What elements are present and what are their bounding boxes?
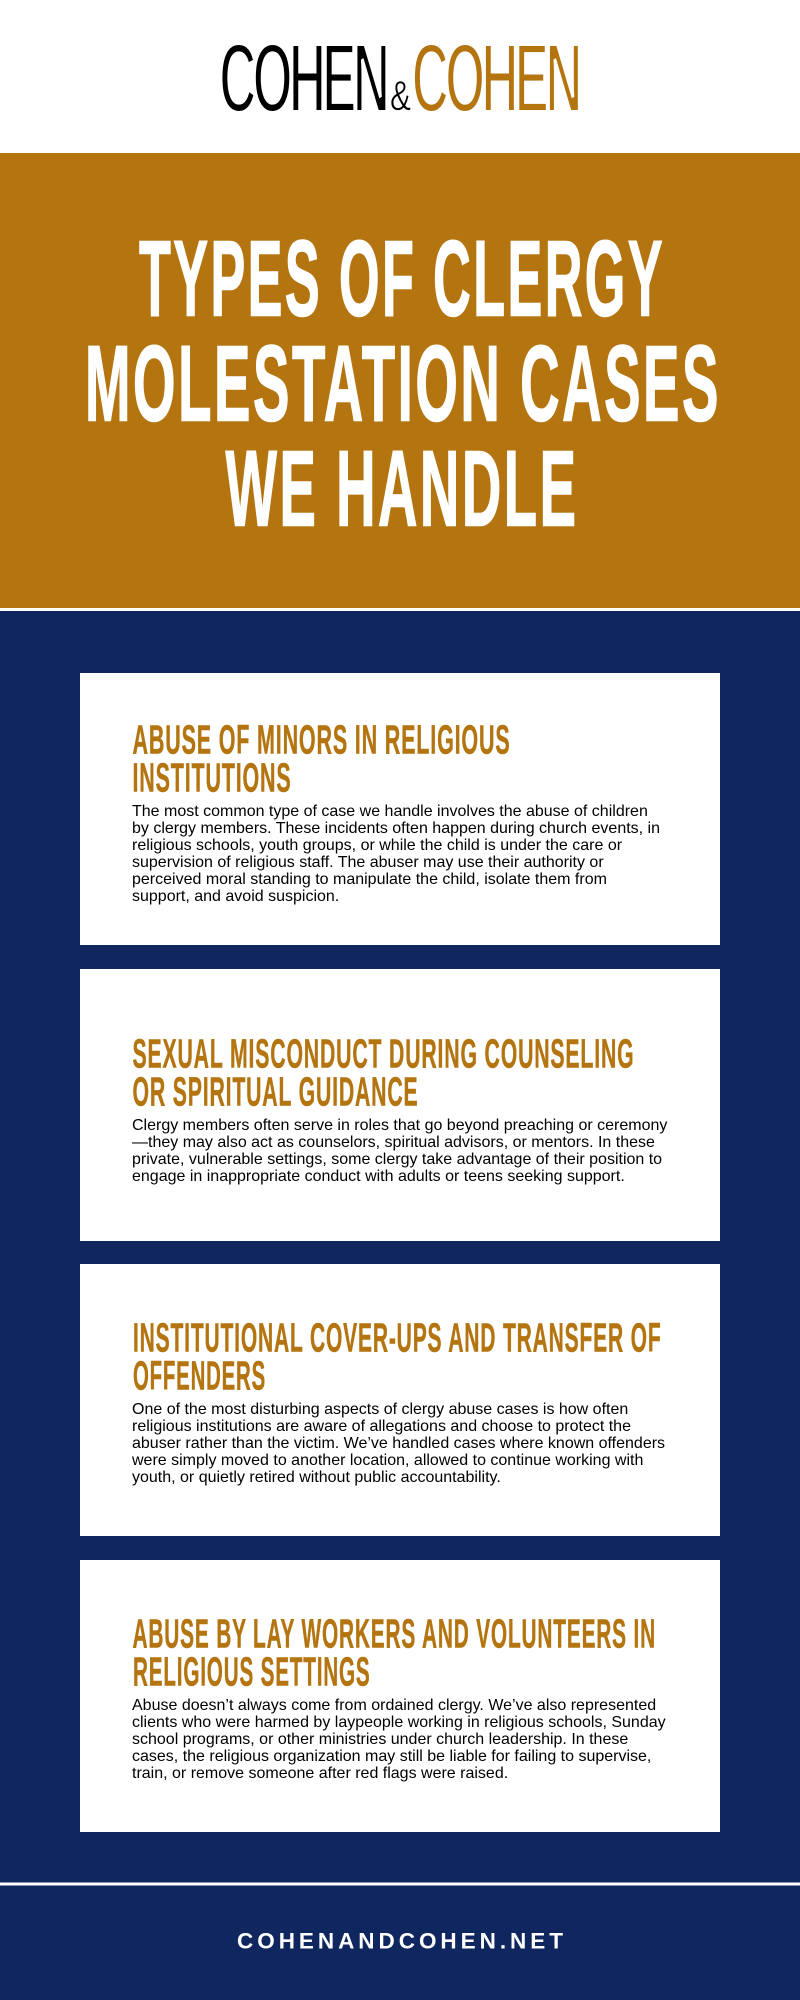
body text: institutional cover-ups: were simply moved to another location, allowed to continue working with bbox=[131, 1452, 643, 1469]
heading: institutional cover-ups bbox=[133, 1314, 662, 1398]
logo: COHEN bbox=[219, 22, 387, 134]
panel: institutional cover-ups bbox=[80, 1264, 720, 1536]
body text: lay workers and volunteers: train, or remove someone after red flags were raised. bbox=[132, 1765, 508, 1782]
heading: abuse of minors: INSTITUTIONS bbox=[132, 754, 292, 800]
body text: lay workers and volunteers: clients who were harmed by laypeople working in religious schools, Sunday bbox=[132, 1714, 666, 1731]
page background bbox=[0, 611, 800, 2000]
body text: sexual misconduct: Clergy members often serve in roles that go beyond preaching or ceremony bbox=[132, 1117, 667, 1134]
body text: abuse of minors: by clergy members. These incidents often happen during church events, in bbox=[132, 820, 660, 837]
body text: abuse of minors: supervision of religious staff. The abuser may use their authority or bbox=[132, 854, 604, 871]
body text: sexual misconduct bbox=[132, 1117, 667, 1185]
heading: lay workers and volunteers bbox=[132, 1610, 656, 1694]
body text: institutional cover-ups: One of the most disturbing aspects of clergy abuse cases is how often bbox=[132, 1401, 628, 1418]
body text: institutional cover-ups: religious institutions are aware of allegations and choose to protect the bbox=[132, 1418, 631, 1435]
heading: lay workers and volunteers: RELIGIOUS SETTINGS bbox=[133, 1648, 370, 1694]
body text: sexual misconduct: engage in inappropriate conduct with adults or teens seeking support. bbox=[132, 1168, 625, 1185]
body text: institutional cover-ups bbox=[131, 1401, 665, 1486]
body text: institutional cover-ups: youth, or quietly retired without public accountability. bbox=[132, 1469, 501, 1486]
logo bbox=[219, 22, 580, 134]
footer website: COHENANDCOHEN.NET bbox=[237, 1928, 563, 1954]
heading: institutional cover-ups: OFFENDERS bbox=[133, 1352, 266, 1398]
title bbox=[85, 218, 721, 548]
body text: sexual misconduct: —they may also act as counselors, spiritual advisors, or mentors. In these bbox=[132, 1134, 655, 1151]
body text: abuse of minors: The most common type of case we handle involves the abuse of children bbox=[132, 803, 648, 820]
body text: lay workers and volunteers: cases, the religious organization may still be liable for failing to supervise, bbox=[132, 1748, 651, 1765]
heading: abuse of minors bbox=[132, 716, 510, 800]
title banner bbox=[0, 153, 800, 608]
logo: COHEN bbox=[412, 22, 580, 134]
panel: sexual misconduct bbox=[80, 969, 720, 1241]
body text: lay workers and volunteers bbox=[132, 1697, 666, 1782]
body text: abuse of minors: religious schools, youth groups, or while the child is under the care or bbox=[132, 837, 623, 854]
panel: lay workers and volunteers bbox=[80, 1560, 720, 1832]
body text: abuse of minors: support, and avoid suspicion. bbox=[132, 888, 339, 905]
heading: sexual misconduct: OR SPIRITUAL GUIDANCE bbox=[132, 1068, 418, 1114]
body text: sexual misconduct: private, vulnerable settings, some clergy take advantage of their position to bbox=[132, 1151, 662, 1168]
body text: institutional cover-ups: abuser rather than the victim. We’ve handled cases where known offenders bbox=[132, 1435, 665, 1452]
body text: abuse of minors bbox=[132, 803, 660, 905]
body text: abuse of minors: perceived moral standing to manipulate the child, isolate them from bbox=[132, 871, 607, 888]
logo: & bbox=[390, 72, 411, 119]
heading: sexual misconduct bbox=[132, 1030, 634, 1114]
panel: abuse of minors bbox=[80, 673, 720, 945]
body text: lay workers and volunteers: Abuse doesn’t always come from ordained clergy. We’ve also represented bbox=[132, 1697, 656, 1714]
body text: lay workers and volunteers: school programs, or other ministries under church leadership. In these bbox=[132, 1731, 628, 1748]
